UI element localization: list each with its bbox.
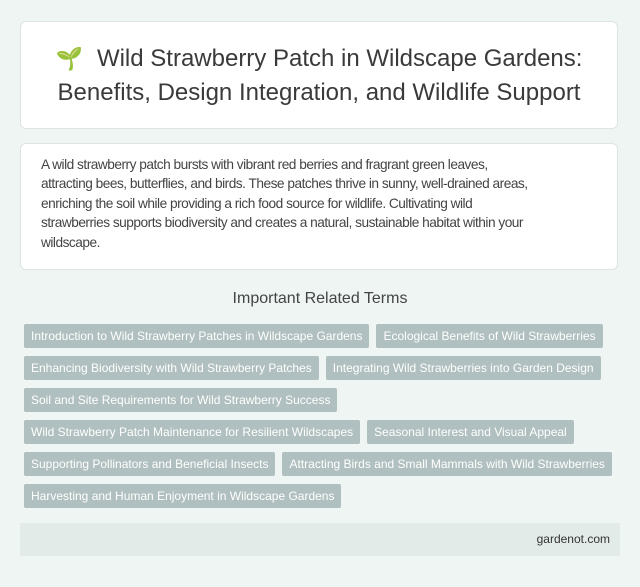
heading: related terms: Important Related Terms	[233, 290, 407, 307]
description panel	[20, 143, 618, 270]
description panel: wildscape.	[41, 235, 100, 250]
tag list: Seasonal Interest and Visual Appeal	[374, 425, 567, 439]
description panel: enriching the soil while providing a rich food source for wildlife. Cultivating wild	[41, 196, 472, 211]
description panel: strawberries supports biodiversity and creates a natural, sustainable habitat within your	[41, 215, 523, 230]
tag list: Introduction to Wild Strawberry Patches in Wildscape Gardens	[31, 329, 362, 343]
tag list	[24, 324, 612, 508]
tag list: Harvesting and Human Enjoyment in Wildscape Gardens	[31, 489, 334, 503]
footer: gardenot.com	[537, 532, 610, 546]
footer	[20, 523, 620, 556]
title panel	[20, 21, 618, 129]
tag list: Enhancing Biodiversity with Wild Strawberry Patches	[31, 361, 312, 375]
tag list: Attracting Birds and Small Mammals with Wild Strawberries	[289, 457, 605, 471]
title panel: Benefits, Design Integration, and Wildlife Support	[58, 79, 580, 106]
tag list: Soil and Site Requirements for Wild Strawberry Success	[31, 393, 330, 407]
title panel: 🌱 Wild Strawberry Patch in Wildscape Gardens:	[56, 45, 582, 72]
tag list: Wild Strawberry Patch Maintenance for Resilient Wildscapes	[31, 425, 353, 439]
tag list: Supporting Pollinators and Beneficial Insects	[31, 457, 268, 471]
description panel: A wild strawberry patch bursts with vibrant red berries and fragrant green leaves,	[41, 157, 488, 172]
description panel: attracting bees, butterflies, and birds. These patches thrive in sunny, well-drained areas,	[41, 176, 528, 191]
tag list: Ecological Benefits of Wild Strawberries	[383, 329, 596, 343]
tag list: Integrating Wild Strawberries into Garden Design	[333, 361, 594, 375]
